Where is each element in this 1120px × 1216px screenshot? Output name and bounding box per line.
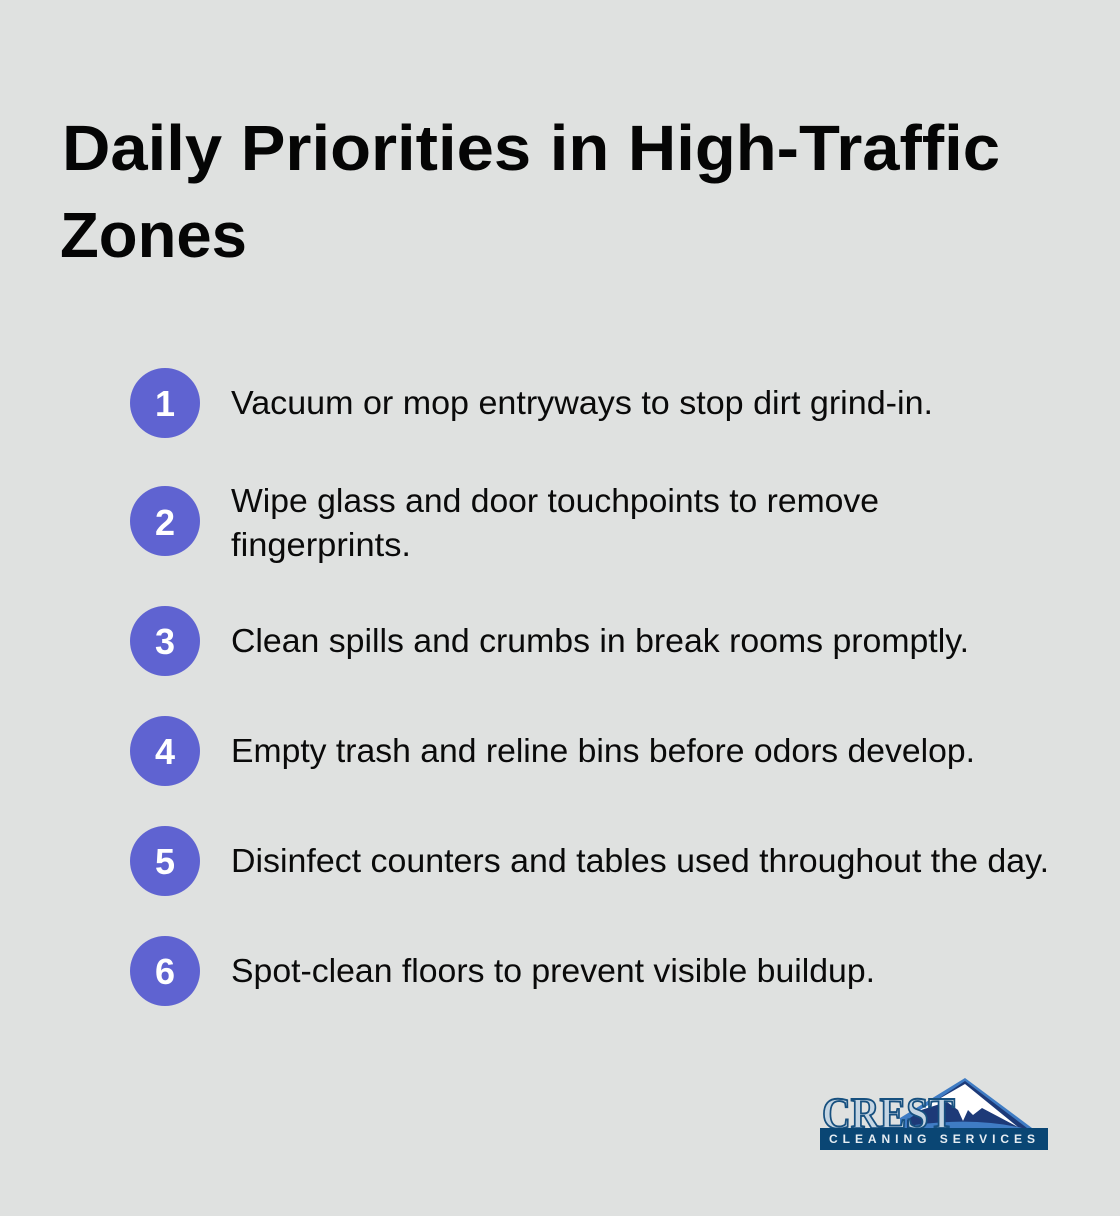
item 2: fingerprints. [231,526,411,563]
item 5: 5 [155,841,175,882]
item 5 [130,826,1049,896]
item 6: 6 [155,951,175,992]
logo band: CLEANING SERVICES [829,1132,1035,1146]
logo wordmark: CREST [822,1089,955,1138]
item 6 [130,936,875,1006]
icon: mountain [900,1078,1032,1128]
item 1: Vacuum or mop entryways to stop dirt grind-in. [231,384,933,421]
item 4: Empty trash and reline bins before odors develop. [231,732,975,769]
list of daily priorities [130,368,1049,1006]
item 3 [130,606,969,676]
item 2: Wipe glass and door touchpoints to remove [231,482,879,519]
logo band [820,1128,1048,1150]
item 3: 3 [155,621,175,662]
title: Daily Priorities in High-Traffic [62,112,1000,184]
title: Zones [60,199,247,271]
item 6: Spot-clean floors to prevent visible buildup. [231,952,875,989]
item 3: Clean spills and crumbs in break rooms promptly. [231,622,969,659]
item 5: Disinfect counters and tables used throughout the day. [231,842,1049,879]
logo: Crest Cleaning Services [820,1078,1048,1150]
item 1: 1 [155,383,175,424]
item 2 [130,482,879,563]
item 4 [130,716,975,786]
item 4: 4 [155,731,175,772]
item 2: 2 [155,502,175,543]
item 1 [130,368,933,438]
title [60,112,1000,271]
